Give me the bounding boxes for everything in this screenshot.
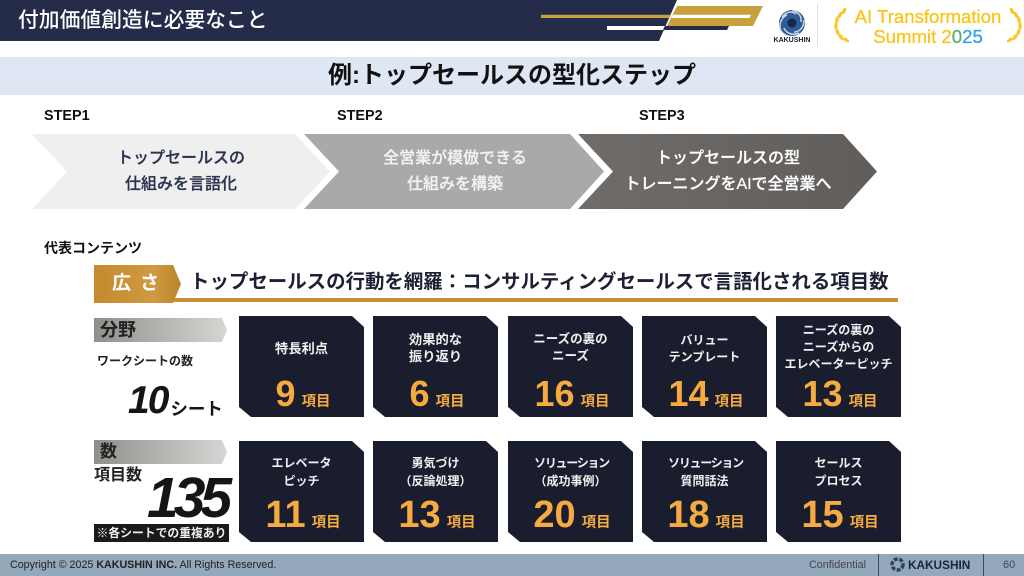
- card: 勇気づけ: [373, 441, 498, 542]
- card: エレベーターピッチ派生: 13 項目: [802, 373, 878, 414]
- card: バリューテンプレート: バリュー: [680, 333, 728, 347]
- card: エレベータピッチ: [239, 441, 364, 542]
- header title: 付加価値創造に必要なこと: [18, 9, 268, 32]
- heading underline: [174, 298, 898, 302]
- card: エレベーターピッチ派生: ニーズの裏の: [803, 323, 874, 337]
- KAKUSHIN logo: [774, 9, 810, 44]
- step 3 text: トレーニングをAIで全営業へ: [624, 176, 832, 193]
- icon: footer logo mark: [890, 557, 905, 572]
- field tag: 分野: [100, 320, 136, 340]
- card: セールスプロセス: セールス: [814, 456, 862, 470]
- card: エレベータピッチ: エレベータ: [271, 456, 332, 470]
- step 1 text: 仕組みを言語化: [125, 176, 237, 193]
- card: ソリューション質問話法: 18 項目: [667, 494, 745, 536]
- card: ソリューション成功事例: [508, 441, 633, 542]
- count tag: 数: [100, 442, 117, 461]
- step 2 text: [384, 149, 525, 191]
- breadth tag: [94, 265, 181, 303]
- card: 効果的な振り返り: [373, 316, 498, 417]
- representative contents label: 代表コンテンツ: [44, 240, 142, 256]
- card: ソリューション質問話法: ソリューション: [668, 456, 743, 470]
- header bar: [0, 0, 680, 41]
- step 3 label: STEP3: [639, 108, 685, 124]
- arrow: step 1: [32, 134, 330, 209]
- card: ニーズの裏のニーズ: 16 項目: [534, 373, 610, 414]
- left laurel: [834, 8, 850, 42]
- card: ソリューション成功事例: ソリューション: [534, 456, 609, 470]
- footer wordmark: KAKUSHIN: [908, 558, 970, 572]
- card: ソリューション成功事例: 20 項目: [533, 494, 611, 536]
- step 1 label: STEP1: [44, 108, 90, 124]
- count tag: [94, 440, 227, 464]
- card: 効果的な振り返り: 効果的な: [409, 332, 462, 347]
- breadth section heading: [94, 265, 898, 303]
- card: エレベータピッチ: ピッチ: [283, 474, 320, 488]
- icon: logo aperture: [779, 9, 805, 36]
- step 1 text: [122, 149, 244, 191]
- card: 特長利点: 特長利点: [275, 341, 328, 356]
- card: 特長利点: 9 項目: [275, 373, 331, 414]
- summit title: AI Transformation: [855, 6, 1001, 27]
- arrow: step 3: [578, 134, 877, 209]
- copyright: Copyright © 2025 KAKUSHIN INC. All Rights Reserved.: [10, 559, 276, 571]
- summit title: Summit 2025: [873, 26, 983, 46]
- card: セールスプロセス: [776, 441, 901, 542]
- step 2 label: STEP2: [337, 108, 383, 124]
- card: エレベーターピッチ派生: エレベーターピッチ: [784, 357, 892, 371]
- panel: item count: [94, 440, 233, 542]
- panel: field worksheets: [94, 318, 227, 422]
- step 2 text: 全営業が模倣できる: [383, 150, 527, 167]
- step 2 text: 仕組みを構築: [407, 176, 503, 193]
- logo divider: [817, 4, 818, 47]
- page number: 60: [1003, 559, 1015, 571]
- card: ニーズの裏のニーズ: [508, 316, 633, 417]
- card: セールスプロセス: 15 項目: [801, 494, 879, 536]
- step 3 text: トップセールスの型: [656, 150, 800, 167]
- card: バリューテンプレート: テンプレート: [669, 350, 740, 364]
- summit title: [854, 6, 1001, 46]
- card: ソリューション質問話法: 質問話法: [680, 474, 728, 488]
- card: 効果的な振り返り: 6 項目: [409, 373, 465, 414]
- field tag: [94, 318, 227, 342]
- card: セールスプロセス: プロセス: [814, 474, 862, 488]
- card: バリューテンプレート: [642, 316, 767, 417]
- right laurel: [1006, 8, 1022, 42]
- slide title: 例:トップセールスの型化ステップ: [328, 62, 696, 89]
- item count label: 項目数: [94, 467, 142, 484]
- card: ニーズの裏のニーズ: ニーズ: [552, 349, 589, 363]
- arrow: step 2: [304, 134, 604, 209]
- card: エレベーターピッチ派生: ニーズからの: [803, 340, 874, 354]
- card: 特長利点: [239, 316, 364, 417]
- worksheet count: 10シート: [128, 379, 223, 422]
- header accent stripes: [541, 6, 763, 30]
- logo wordmark: KAKUSHIN: [774, 37, 810, 44]
- slide title band: [0, 57, 1024, 95]
- card: 勇気づけ: （反論処理）: [399, 474, 472, 488]
- summit badge: [834, 6, 1022, 46]
- card: ニーズの裏のニーズ: ニーズの裏の: [533, 332, 608, 346]
- card: 勇気づけ: 13 項目: [398, 494, 476, 536]
- card: ソリューション質問話法: [642, 441, 767, 542]
- worksheet count label: ワークシートの数: [97, 354, 193, 368]
- step 3 text: [630, 149, 831, 191]
- card: 効果的な振り返り: 振り返り: [409, 349, 462, 364]
- breadth heading text: トップセールスの行動を網羅：コンサルティングセールスで言語化される項目数: [190, 271, 889, 293]
- footer bar: [0, 554, 1024, 576]
- card: バリューテンプレート: 14 項目: [668, 373, 744, 414]
- footer logo: [878, 554, 984, 576]
- card: エレベータピッチ: 11 項目: [265, 494, 341, 536]
- confidential label: Confidential: [809, 559, 866, 571]
- breadth tag: 広さ: [112, 273, 168, 294]
- total item count: 135: [147, 466, 227, 530]
- card: エレベーターピッチ派生: [776, 316, 901, 417]
- card: 勇気づけ: 勇気づけ: [411, 456, 460, 470]
- card: ソリューション成功事例: （成功事例）: [534, 474, 606, 488]
- step 1 text: トップセールスの: [117, 150, 245, 167]
- duplicate note: ※各シートでの重複あり: [97, 526, 226, 540]
